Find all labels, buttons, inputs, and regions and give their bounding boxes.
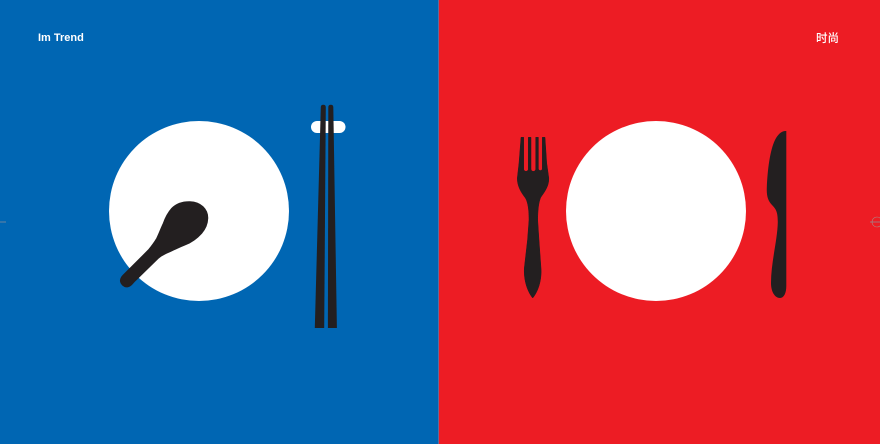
heading: 时尚: 时尚 [816,30,839,46]
icon: knife [767,131,786,298]
plate: white circle on red [566,121,746,301]
icon: chopstick rest [311,121,346,133]
plate: white circle on blue [109,121,289,301]
heading: Im Trend: Im Trend [38,32,84,44]
icon: fork [517,137,549,298]
icon: chopsticks [315,105,337,328]
icon: spoon [120,202,208,287]
